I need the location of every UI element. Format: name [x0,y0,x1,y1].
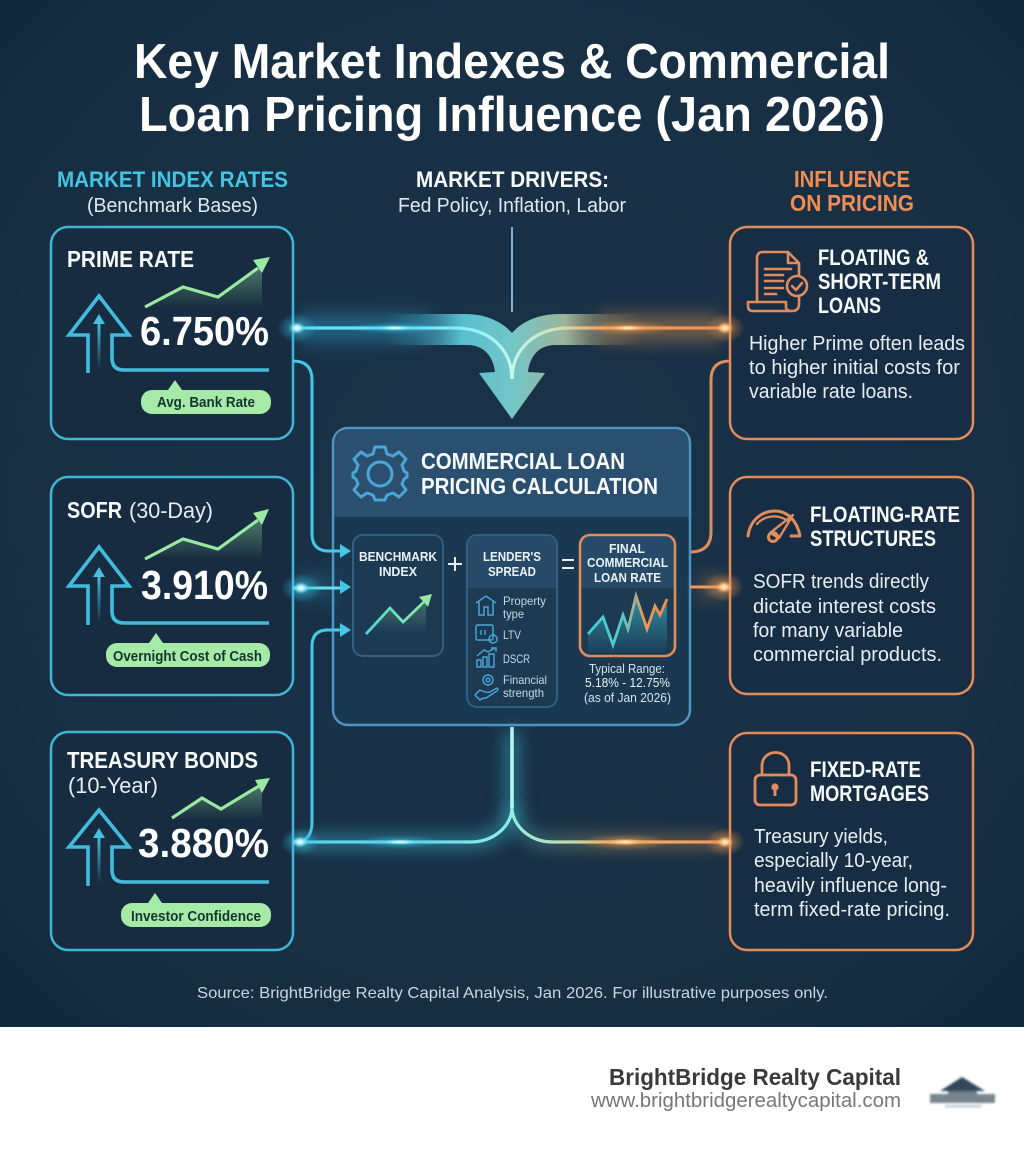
box: final commercial loan rate: FINAL [609,541,645,556]
label pill: investor confidence: Investor Confidence [131,909,261,925]
panel: fixed-rate mortgages [730,733,973,950]
title: Key Market Indexes & Commercial [134,35,890,89]
icon: up arrow [69,547,269,625]
description: variable rate loans. [749,381,913,403]
arrow: sofr into benchmark [281,573,351,603]
label pill: overnight cost of cash: Overnight Cost of Cash [113,649,262,665]
column heading: market drivers: Fed Policy, Inflation, Labor [398,195,626,217]
operator: equals [562,560,574,568]
label: property type [503,594,546,621]
description [754,826,950,921]
label pill: avg bank rate [141,380,271,414]
icon: financial strength [475,675,498,700]
heading: prime rate: PRIME RATE [67,246,194,272]
heading [810,502,960,551]
column heading: market index rates: MARKET INDEX RATES [57,167,288,192]
heading [421,448,658,499]
heading: sofr 30-day [67,497,213,523]
label pill: investor confidence [121,893,271,927]
heading [818,245,941,318]
label: financial strength: Financial [503,673,547,687]
column heading: influence on pricing [790,166,914,216]
box: lender's spread [467,535,557,707]
heading: sofr 30-day: SOFR [67,497,122,523]
chart: sofr trend [145,509,269,560]
line: market drivers feed [511,227,513,312]
heading [810,757,929,806]
description: heavily influence long- [754,875,947,897]
box: final commercial loan rate: LOAN RATE [594,570,661,585]
heading: FIXED-RATE [810,757,921,782]
column heading: market drivers: MARKET DRIVERS: [416,167,609,192]
arrow: treasury into benchmark [325,623,351,637]
heading: LOANS [818,293,881,318]
description: commercial products. [753,644,942,666]
label: ltv: LTV [503,628,521,642]
footer: company name and website [590,1064,901,1112]
heading: sofr 30-day: (30-Day) [129,498,213,523]
label pill: avg bank rate: Avg. Bank Rate [157,395,255,411]
arrow: merged flow into calculation [277,313,745,419]
logo: brightbridge mark [930,1077,995,1108]
label: property type: type [503,607,524,621]
connector: prime to benchmark index [293,361,342,551]
description: especially 10-year, [754,850,913,872]
chart: final rate sparkline [588,596,667,652]
heading: SHORT-TERM [818,269,941,294]
chart: treasury trend [172,778,270,820]
title: Loan Pricing Influence (Jan 2026) [139,88,885,142]
box: benchmark index: BENCHMARK [359,549,438,564]
panel: sofr [51,477,293,695]
description: term fixed-rate pricing. [754,899,950,921]
icon: up arrow [69,296,269,373]
description: SOFR trends directly [753,571,929,593]
description: dictate interest costs [753,596,936,618]
box: benchmark index: INDEX [379,564,417,579]
footer: company name and website: www.brightbridgerealtycapital.com [590,1090,901,1112]
box: lender's spread: SPREAD [488,564,536,579]
icon: gear [353,447,407,500]
panel: floating-rate structures [730,477,973,694]
panel: prime rate [51,227,293,439]
panel: treasury bonds [51,732,293,950]
description [749,333,965,403]
typical range note: 5.18% - 12.75% [585,676,670,690]
heading: FLOATING & [818,245,929,270]
value: 6.750%: 6.750% [140,308,269,354]
label: financial strength [503,673,547,700]
icon: house [476,596,496,615]
heading: STRUCTURES [810,526,936,551]
footer: company name and website: BrightBridge Realty Capital [609,1064,901,1090]
icon: ltv [476,625,497,643]
title [134,35,890,142]
panel: commercial loan pricing calculation [333,428,690,725]
typical range note [584,662,671,705]
icon: up arrow [69,810,269,886]
heading: treasury bonds 10-year: (10-Year) [68,773,158,798]
connector: treasury to benchmark index [303,630,342,841]
heading: treasury bonds 10-year [67,747,258,798]
icon: gauge [748,511,800,542]
column heading: influence on pricing: ON PRICING [790,190,914,216]
typical range note: Typical Range: [589,662,665,676]
panel: floating and short-term loans [730,227,973,439]
icon: document with check [748,252,807,311]
box: final commercial loan rate: COMMERCIAL [587,555,668,570]
connector: final rate to floating loans [690,361,730,552]
heading: COMMERCIAL LOAN [421,448,625,474]
column heading: influence on pricing: INFLUENCE [794,166,910,192]
label pill: overnight cost of cash [106,633,270,667]
description [753,571,942,666]
box: final commercial loan rate [580,535,675,656]
label: financial strength: strength [503,686,544,700]
heading: FLOATING-RATE [810,502,960,527]
column heading: market index rates: (Benchmark Bases) [87,195,258,217]
label: property type: Property [503,594,546,608]
column heading: market index rates [57,167,288,217]
typical range note: (as of Jan 2026) [584,691,671,705]
icon: dscr [477,648,496,667]
box: benchmark index [353,535,443,656]
heading: treasury bonds 10-year: TREASURY BONDS [67,747,258,773]
operator: plus [448,557,462,571]
chart: prime trend [145,257,270,308]
box: lender's spread: LENDER'S [483,549,541,564]
label: dscr: DSCR [503,652,530,666]
description: Higher Prime often leads [749,333,965,355]
connector: calculation to sofr influence [690,572,744,602]
icon: padlock [755,752,796,805]
description: to higher initial costs for [749,357,960,379]
heading: MORTGAGES [810,781,929,806]
description: Treasury yields, [754,826,888,848]
value: 3.910%: 3.910% [141,562,268,608]
connector: treasury through calculation split to fixed-rate [280,727,745,856]
heading: PRICING CALCULATION [421,473,658,499]
source note: Source: BrightBridge Realty Capital Analysis, Jan 2026. For illustrative purposes only. [197,985,828,1002]
description: for many variable [753,620,903,642]
chart: benchmark trend [366,594,432,634]
column heading: market drivers [398,167,626,217]
value: 3.880%: 3.880% [138,820,269,866]
arrow: prime into benchmark [325,544,351,558]
